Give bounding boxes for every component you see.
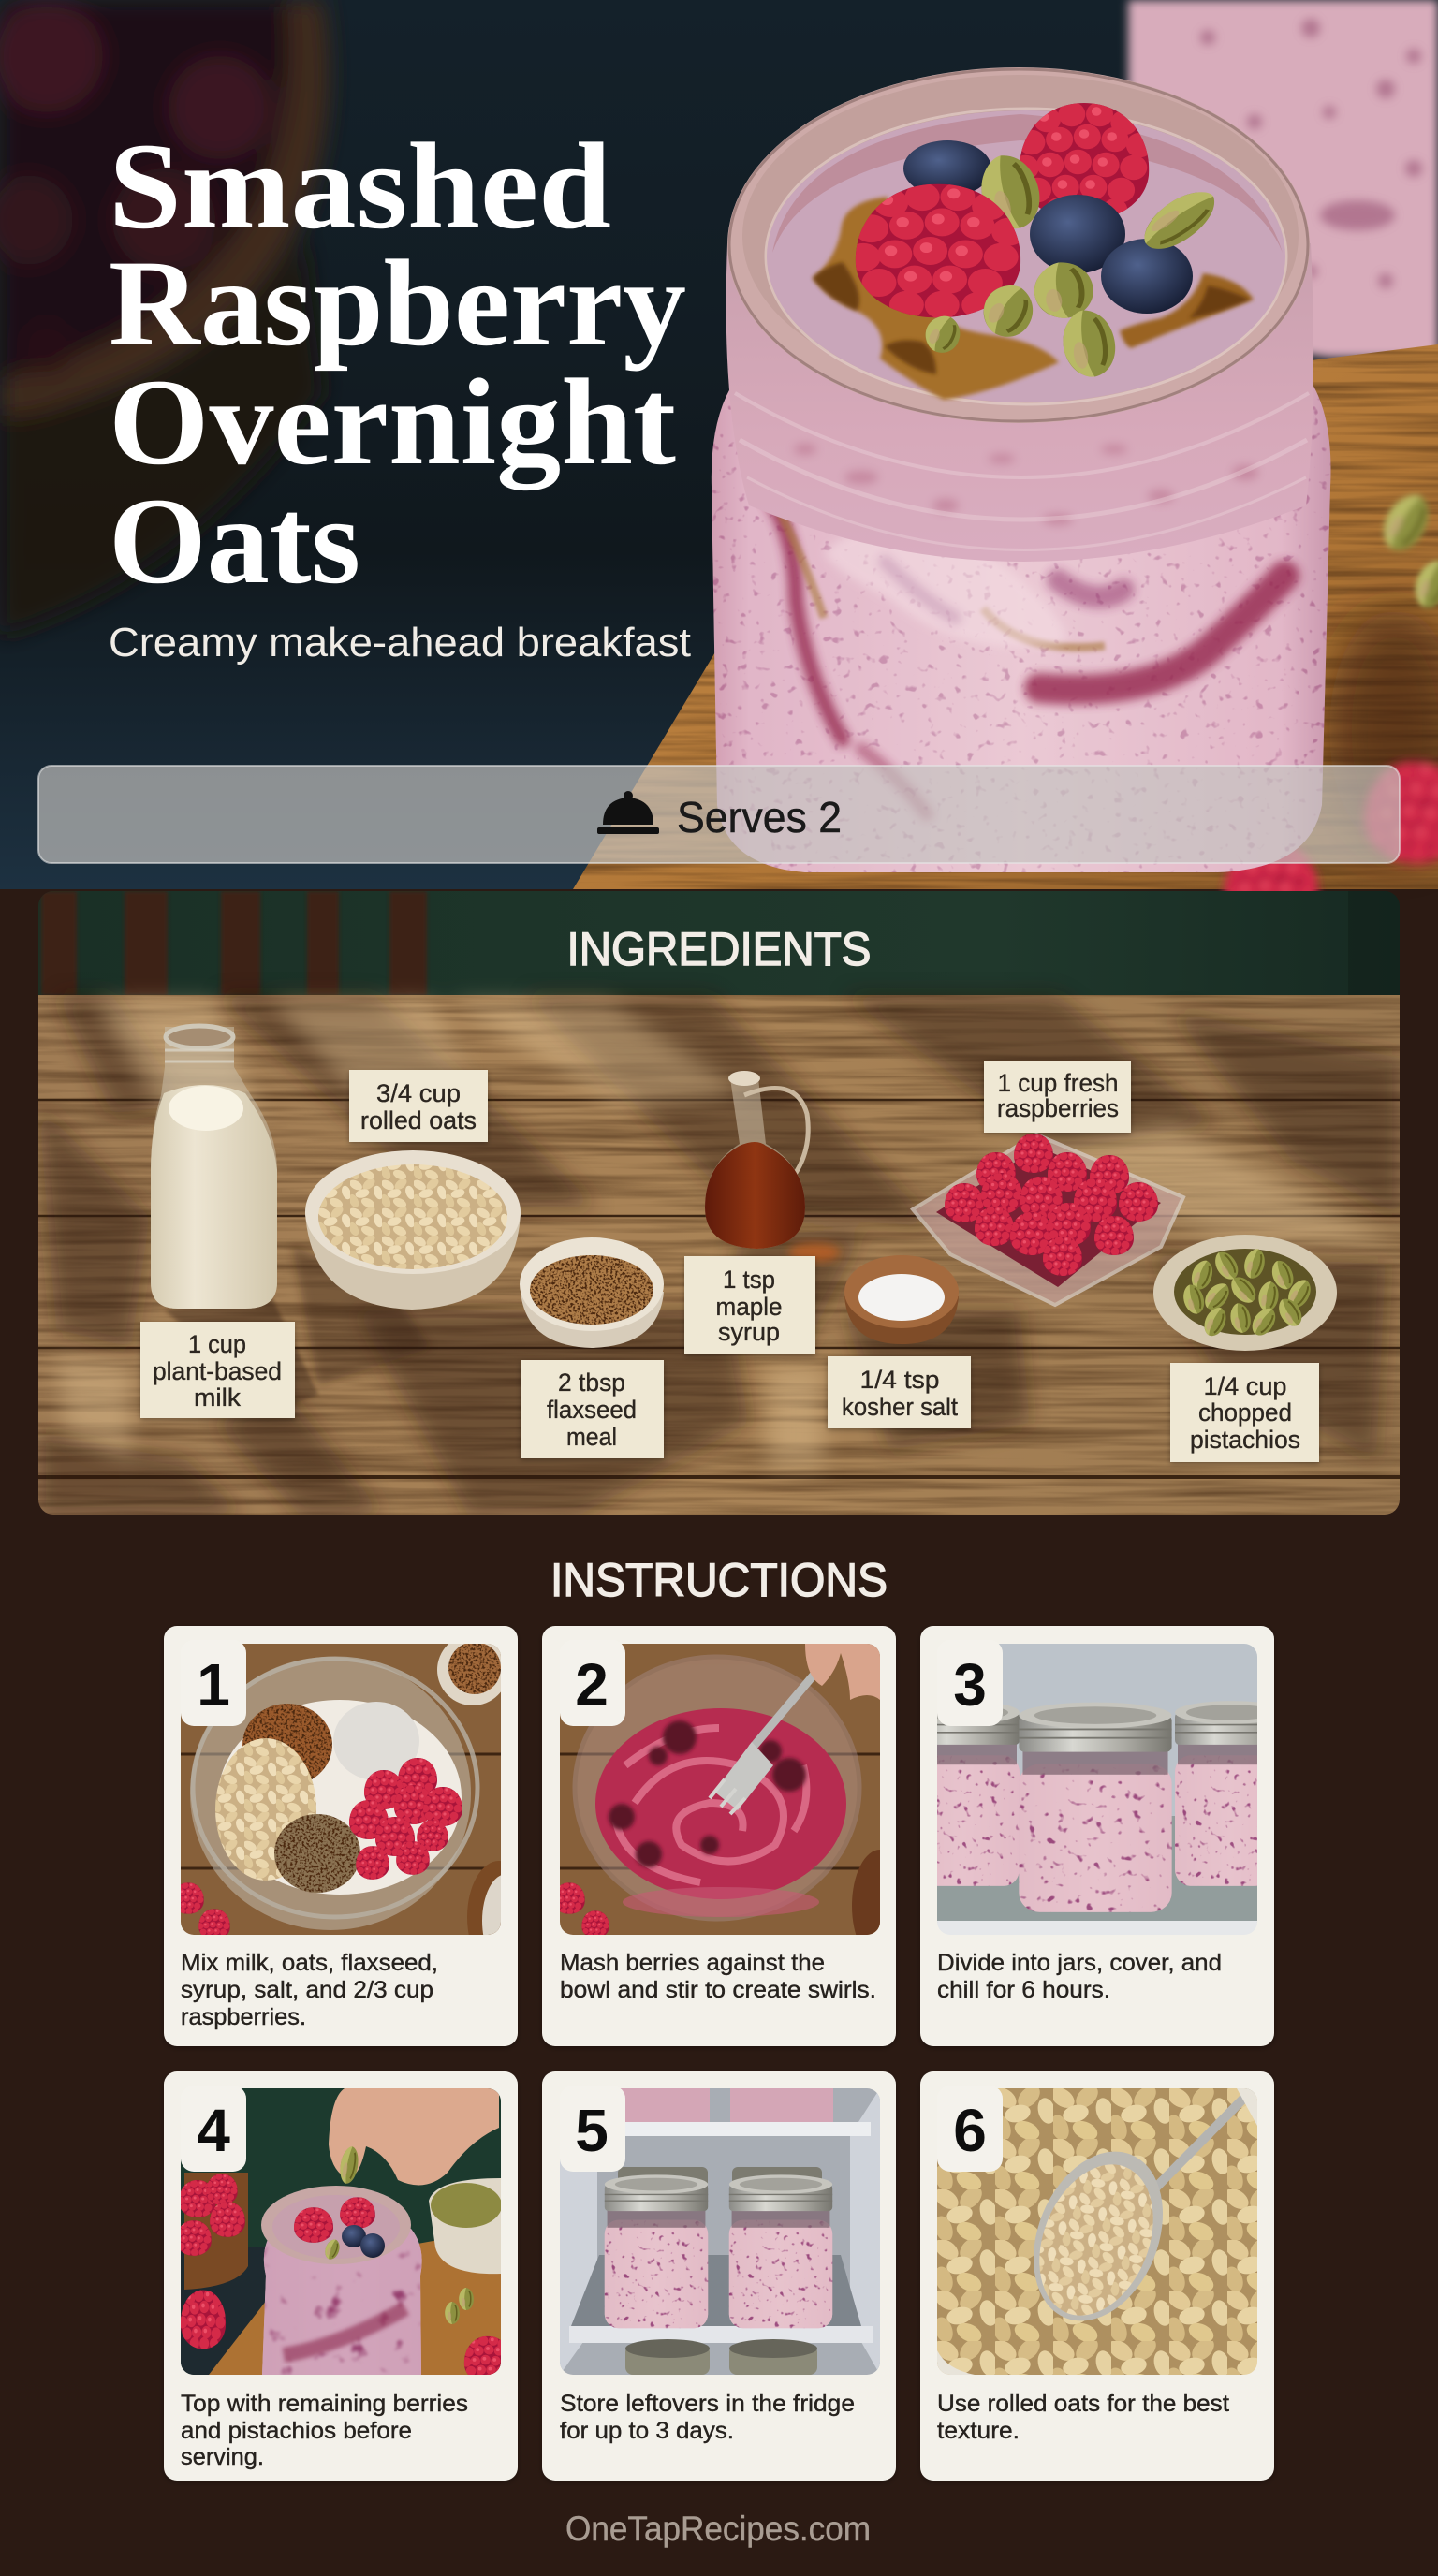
- icon: milk bottle: [151, 1026, 318, 1409]
- step card 4: [164, 2071, 518, 2481]
- icon: rolled oats bowl: [292, 1150, 521, 1385]
- label: plant-based milk: plant-based: [153, 1357, 282, 1385]
- icon: raspberry clamshell: [913, 1133, 1183, 1305]
- step text: [181, 2391, 468, 2470]
- step number badge: 2: [575, 1651, 609, 1719]
- step number badge: [560, 2086, 625, 2172]
- main jar: [712, 67, 1330, 872]
- label: kosher salt: [828, 1356, 971, 1428]
- step text: [560, 2391, 855, 2444]
- label: chopped pistachios: 1/4 cup: [1204, 1372, 1286, 1400]
- step number badge: [937, 1640, 1003, 1726]
- raspberry swirls: [763, 487, 1284, 814]
- photo: mashing berries: [551, 1644, 908, 1962]
- step card 2: [542, 1626, 908, 2046]
- hero photo: overnight oats jar: [0, 0, 1438, 937]
- step card 6: [920, 2071, 1274, 2481]
- label: flaxseed meal: [521, 1360, 664, 1458]
- step text: texture.: [937, 2418, 1020, 2444]
- step number badge: 4: [197, 2097, 230, 2164]
- step card 1: [164, 1626, 531, 2046]
- jar body: [712, 374, 1330, 872]
- photo: topping the jar: [174, 2088, 513, 2384]
- label: rolled oats: rolled oats: [360, 1106, 477, 1134]
- step text: Mash berries against the: [560, 1950, 825, 1976]
- label: maple syrup: syrup: [718, 1318, 780, 1346]
- servings text: Serves 2: [677, 793, 842, 842]
- step number badge: 6: [953, 2097, 987, 2164]
- step text: [181, 1950, 438, 2030]
- step card 3: [907, 1626, 1287, 2046]
- title: Raspberry: [109, 234, 686, 372]
- wooden board: [573, 344, 1438, 889]
- blurred background jar: [1128, 0, 1438, 358]
- step number badge: 1: [197, 1651, 230, 1719]
- title: [109, 117, 686, 609]
- label: kosher salt: 1/4 tsp: [859, 1366, 940, 1394]
- syrup streak in jar: [777, 505, 1105, 648]
- pistachios on board: [1374, 487, 1438, 558]
- label: maple syrup: 1 tsp: [723, 1266, 775, 1294]
- label: fresh raspberries: 1 cup fresh: [998, 1069, 1118, 1097]
- blurred raspberry bowl: [0, 0, 329, 637]
- step text: [937, 2391, 1229, 2444]
- step card 5: [542, 2071, 896, 2481]
- raspberries on board: [1358, 759, 1438, 866]
- photo: jars in fridge: [560, 2088, 880, 2375]
- photo: rolled oats with spoon: [937, 2088, 1257, 2375]
- heading: instructions: INSTRUCTIONS: [550, 1554, 888, 1606]
- label: chopped pistachios: chopped: [1198, 1398, 1292, 1427]
- title: Smashed: [109, 117, 611, 255]
- photo: mixing bowl: [181, 1644, 501, 1935]
- wooden table: [38, 995, 1400, 1515]
- step number badge: [560, 1640, 625, 1726]
- step number badge: [181, 1640, 246, 1726]
- panel: ingredients: [38, 891, 1400, 1515]
- label: flaxseed meal: flaxseed: [547, 1396, 637, 1424]
- berries and pistachios topping: [846, 100, 1225, 381]
- step text: [560, 1950, 876, 2003]
- maple syrup swirl: [813, 197, 1254, 400]
- step text: Top with remaining berries: [181, 2391, 468, 2417]
- label: flaxseed meal: 2 tbsp: [558, 1368, 625, 1397]
- jar neck: [726, 243, 1313, 562]
- label: rolled oats: [349, 1070, 488, 1142]
- step number badge: [937, 2086, 1003, 2172]
- label: maple syrup: maple: [715, 1293, 783, 1321]
- step text: Mix milk, oats, flaxseed,: [181, 1950, 438, 1976]
- label: kosher salt: kosher salt: [842, 1393, 958, 1421]
- footer brand: OneTapRecipes.com: [565, 2510, 871, 2548]
- icon: maple syrup bottle: [705, 1071, 841, 1262]
- title: Overnight: [109, 353, 676, 490]
- step number badge: 3: [953, 1651, 987, 1719]
- label: rolled oats: 3/4 cup: [376, 1079, 461, 1107]
- step text: for up to 3 days.: [560, 2418, 734, 2444]
- glass rim: [727, 67, 1310, 423]
- step text: and pistachios before: [181, 2418, 412, 2444]
- step text: [937, 1950, 1222, 2003]
- icon: flaxseed bowl: [520, 1237, 664, 1348]
- step text: Divide into jars, cover, and: [937, 1950, 1222, 1976]
- label: fresh raspberries: [984, 1061, 1131, 1133]
- label: plant-based milk: milk: [194, 1383, 242, 1412]
- step text: syrup, salt, and 2/3 cup: [181, 1977, 433, 2003]
- header band with chairs: [38, 891, 1400, 996]
- step number badge: 5: [575, 2097, 609, 2164]
- step text: Store leftovers in the fridge: [560, 2391, 855, 2417]
- step text: Use rolled oats for the best: [937, 2391, 1229, 2417]
- label: flaxseed meal: meal: [566, 1423, 617, 1451]
- step text: chill for 6 hours.: [937, 1977, 1110, 2003]
- icon: kosher salt bowl: [844, 1255, 959, 1344]
- title: Oats: [109, 472, 360, 609]
- label: fresh raspberries: raspberries: [997, 1094, 1119, 1122]
- oats surface: [767, 110, 1285, 402]
- icon: pistachio plate: [1153, 1235, 1337, 1351]
- heading: ingredients: INGREDIENTS: [567, 923, 871, 975]
- icon: serving cloche: [597, 791, 659, 834]
- step text: raspberries.: [181, 2004, 306, 2030]
- step text: bowl and stir to create swirls.: [560, 1977, 876, 2003]
- label: chopped pistachios: [1170, 1363, 1319, 1462]
- serves bar: [38, 766, 1400, 863]
- label: plant-based milk: 1 cup: [188, 1330, 246, 1358]
- table shadows: [38, 995, 1400, 1515]
- label: plant-based milk: [140, 1322, 295, 1418]
- step text: serving.: [181, 2444, 264, 2470]
- subtitle: Creamy make-ahead breakfast: [109, 620, 691, 666]
- step number badge: [181, 2086, 246, 2172]
- label: maple syrup: [684, 1256, 815, 1354]
- photo: chilling jars: [907, 1644, 1287, 1935]
- label: chopped pistachios: pistachios: [1190, 1426, 1300, 1454]
